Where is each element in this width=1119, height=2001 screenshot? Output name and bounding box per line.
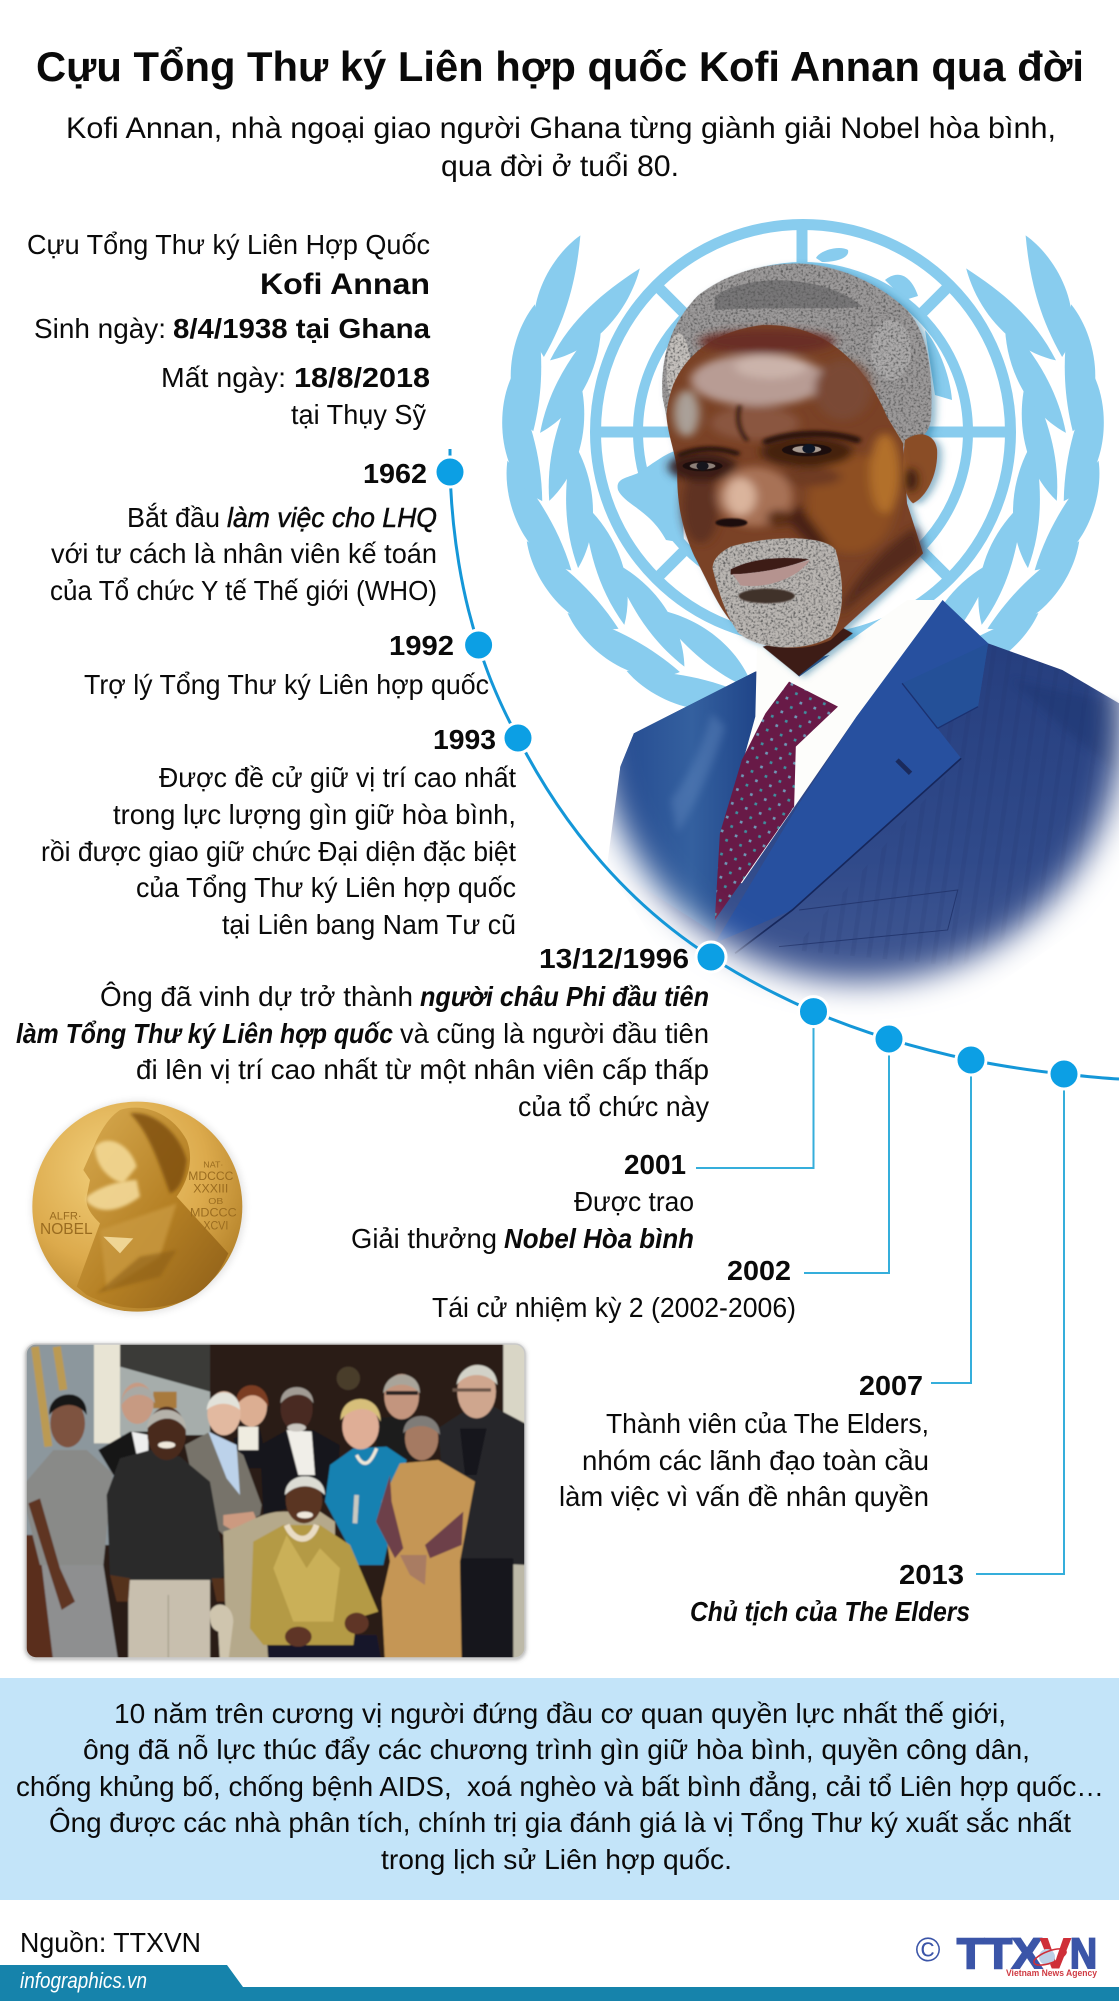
medal inscription: NAT·	[203, 1159, 223, 1169]
mouth and beard	[713, 538, 842, 647]
timeline entry 1962	[50, 458, 437, 606]
middle row	[23, 1391, 475, 1662]
logo: TTXVN: TTX	[957, 1930, 1042, 1978]
lapel	[715, 600, 988, 943]
hair	[662, 263, 931, 453]
icon: UN emblem background	[497, 222, 1109, 731]
subtitle: qua đời ở tuổi 80.	[441, 150, 679, 183]
source note: Nguồn: TTXVN	[20, 1927, 201, 1958]
medal inscription: ALFR·	[49, 1210, 82, 1222]
face and neck	[666, 325, 923, 648]
timeline entry 13/12/1996: đi lên vị trí cao nhất từ một nhân viên cấp thấp	[136, 1054, 709, 1085]
back row	[98, 1365, 528, 1662]
summary text: ông đã nỗ lực thúc đẩy các chương trình gìn giữ hòa bình, quyền công dân,	[83, 1734, 1030, 1765]
timeline entry 1993: của Tổng Thư ký Liên hợp quốc	[136, 872, 516, 903]
profile text block: 18/8/2018	[294, 362, 430, 393]
medal inscription: MDCCC	[188, 1169, 234, 1183]
timeline entry 2002: 2002	[727, 1255, 791, 1286]
photo background	[23, 1342, 528, 1662]
logo: TTXVN: V	[1040, 1930, 1071, 1978]
medal inscription: OB	[208, 1197, 223, 1206]
right laurel branch	[837, 230, 1109, 731]
timeline entry 13/12/1996: của tổ chức này	[518, 1091, 709, 1122]
icon: Nobel medal	[32, 1101, 244, 1313]
timeline entry 1993: Được đề cử giữ vị trí cao nhất	[159, 762, 516, 793]
timeline entry 2013	[690, 1559, 970, 1627]
summary text: chống khủng bố, chống bệnh AIDS, xoá nghèo và bất bình đẳng, cải tổ Liên hợp quốc…	[16, 1770, 1104, 1802]
timeline entry 2001: 2001	[624, 1149, 686, 1180]
timeline dots	[435, 457, 1079, 1089]
timeline entry 13/12/1996	[16, 943, 709, 1122]
timeline entry 2007: 2007	[859, 1370, 923, 1401]
left laurel branch	[497, 230, 769, 731]
emblem rings	[595, 222, 1011, 640]
timeline entry 1993: 1993	[433, 724, 496, 755]
emblem continents	[618, 248, 952, 543]
medal inscription: XXXIII	[193, 1181, 228, 1195]
subtitle: Kofi Annan, nhà ngoại giao người Ghana từng giành giải Nobel hòa bình,	[66, 112, 1056, 145]
timeline entry 2002: Tái cử nhiệm kỳ 2 (2002-2006)	[432, 1292, 796, 1323]
summary text	[16, 1698, 1104, 1875]
timeline entry 2001	[351, 1149, 694, 1254]
timeline entry 1962: với tư cách là nhân viên kế toán	[51, 538, 437, 569]
timeline entry 1993: tại Liên bang Nam Tư cũ	[222, 909, 516, 940]
timeline entry 1962: của Tổ chức Y tế Thế giới (WHO)	[50, 575, 437, 606]
logo: TTXVN: ©	[916, 1931, 940, 1969]
timeline entry 2013: Chủ tịch của The Elders	[690, 1596, 970, 1627]
medal inscription: MDCCC	[190, 1206, 237, 1220]
portrait: head	[662, 263, 937, 676]
timeline entry 13/12/1996: người châu Phi đầu tiên	[420, 981, 709, 1012]
profile text block: Mất ngày:	[161, 362, 286, 393]
nostrils	[715, 518, 747, 527]
medal inscription	[40, 1159, 237, 1238]
timeline entry 2007: làm việc vì vấn đề nhân quyền	[559, 1481, 929, 1512]
facial shading	[668, 330, 923, 617]
timeline entry 2001: Giải thưởng	[351, 1223, 497, 1254]
timeline entry 1962: Bắt đầu	[127, 502, 220, 533]
timeline entry 13/12/1996: Ông đã vinh dự trở thành	[100, 981, 413, 1012]
summary text: trong lịch sử Liên hợp quốc.	[381, 1844, 732, 1875]
timeline entry 1992: 1992	[389, 630, 454, 661]
timeline entry 1962: làm việc cho LHQ	[227, 502, 437, 533]
timeline entry 2013: 2013	[899, 1559, 964, 1590]
summary text: 10 năm trên cương vị người đứng đầu cơ quan quyền lực nhất thế giới,	[114, 1698, 1006, 1729]
brow lines	[680, 407, 857, 455]
timeline entry 1962: 1962	[363, 458, 427, 489]
timeline entry 1993: trong lực lượng gìn giữ hòa bình,	[113, 799, 516, 830]
logo: TTXVN: Vietnam News Agency	[1006, 1968, 1097, 1978]
tie	[715, 682, 838, 920]
shirt and collar	[740, 600, 942, 884]
timeline leader lines	[696, 1012, 1064, 1574]
profile text block: 8/4/1938 tại Ghana	[173, 313, 431, 344]
medal inscription: NOBEL	[40, 1221, 93, 1238]
timeline entry 1992	[84, 630, 489, 700]
logo: TTXVN: N	[1070, 1930, 1097, 1978]
panel: summary	[0, 1678, 1119, 1900]
timeline entry 2007	[559, 1370, 929, 1512]
timeline entry 13/12/1996: và cũng là người đầu tiên	[400, 1018, 709, 1049]
timeline entry 2007: nhóm các lãnh đạo toàn cầu	[582, 1445, 929, 1476]
timeline entry 2007: Thành viên của The Elders,	[606, 1408, 929, 1439]
subtitle	[66, 112, 1056, 183]
photo: The Elders group	[23, 1342, 528, 1662]
timeline entry 13/12/1996: 13/12/1996	[539, 943, 689, 974]
profile text block: Cựu Tổng Thư ký Liên Hợp Quốc	[27, 229, 430, 260]
profile text block: Sinh ngày:	[34, 313, 166, 344]
medal bust	[77, 1108, 228, 1308]
timeline entry 1993: rồi được giao giữ chức Đại diện đặc biệt	[41, 836, 516, 867]
neck shadow under chin	[763, 623, 853, 676]
eyes	[682, 444, 832, 471]
website label: infographics.vn	[20, 1968, 147, 1993]
profile text block: Kofi Annan	[260, 268, 430, 301]
front chair and seated man	[210, 1476, 382, 1662]
timeline entry 1992: Trợ lý Tổng Thư ký Liên hợp quốc	[84, 669, 489, 700]
ear	[903, 434, 937, 503]
footer band	[0, 1965, 1119, 2001]
profile text block	[27, 229, 431, 430]
timeline entry 2002	[432, 1255, 796, 1323]
title: Cựu Tổng Thư ký Liên hợp quốc Kofi Annan qua đời	[36, 43, 1084, 90]
timeline entry 2001: Nobel Hòa bình	[504, 1223, 694, 1254]
portrait: suit and shirt	[607, 600, 1119, 1033]
timeline entry 13/12/1996: làm Tổng Thư ký Liên hợp quốc	[16, 1018, 393, 1049]
timeline curve	[450, 449, 1119, 1079]
profile text block: tại Thụy Sỹ	[291, 399, 426, 430]
summary text: Ông được các nhà phân tích, chính trị gia đánh giá là vị Tổng Thư ký xuất sắc nhất	[49, 1807, 1071, 1838]
logo: TTXVN	[916, 1930, 1097, 1978]
timeline entry 2001: Được trao	[574, 1186, 694, 1217]
medal inscription: XCVI	[203, 1218, 228, 1232]
timeline entry 1993	[41, 724, 516, 940]
